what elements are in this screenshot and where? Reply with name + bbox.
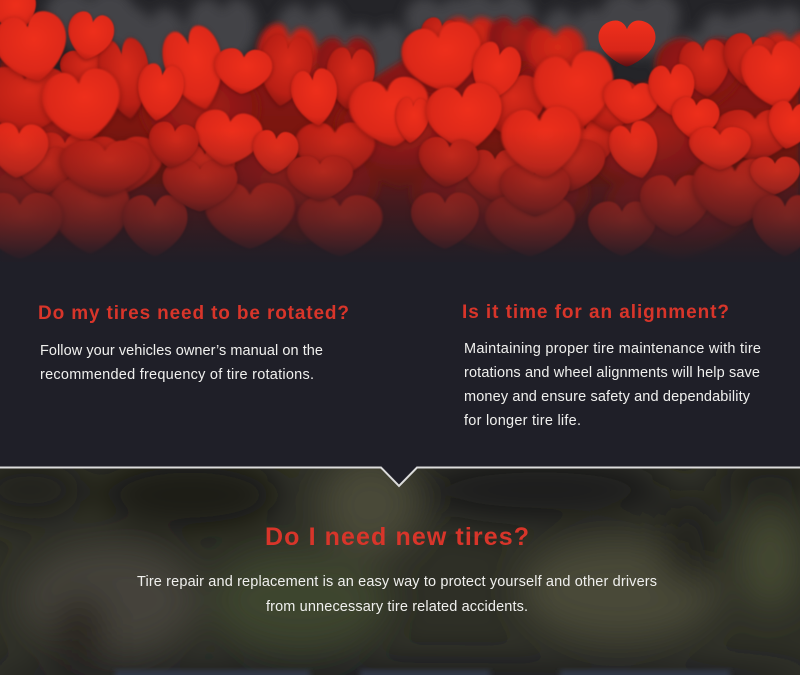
text: alignment: rotations and wheel alignments will help save [464,365,760,381]
text: rotation [40,343,323,383]
background grey hearts [42,0,800,78]
dark red mass behind hearts [0,58,800,244]
panel: new tires section [0,455,800,675]
text: alignment [464,341,761,429]
heading: rotation: Do my tires need to be rotated? [38,303,349,324]
mid row of red hearts [0,16,800,259]
text: rotation: recommended frequency of tire rotations. [40,367,314,383]
back row of dark hearts [0,17,800,258]
floating heart [598,20,656,67]
panel: hearts photo banner [0,0,800,268]
text: new tires: Tire repair and replacement is an easy way to protect yourself and other drivers [137,574,657,590]
blurred photo background [0,455,800,675]
text: alignment: money and ensure safety and dependability [464,389,751,405]
text: alignment: Maintaining proper tire maintenance with tire [464,341,761,357]
text: alignment: for longer tire life. [464,413,581,429]
text: new tires [137,574,657,615]
blurred wheels strip [115,670,730,675]
heading: alignment: Is it time for an alignment? [462,302,729,323]
front row of bright hearts [0,0,800,201]
panel: rotation and alignment section [0,262,800,468]
heading: new tires: Do I need new tires? [265,523,529,551]
divider with notch arrow [0,462,800,486]
text: rotation: Follow your vehicles owner’s manual on the [40,343,323,359]
banner fade to dark [0,138,800,262]
text: new tires: from unnecessary tire related accidents. [266,599,528,615]
